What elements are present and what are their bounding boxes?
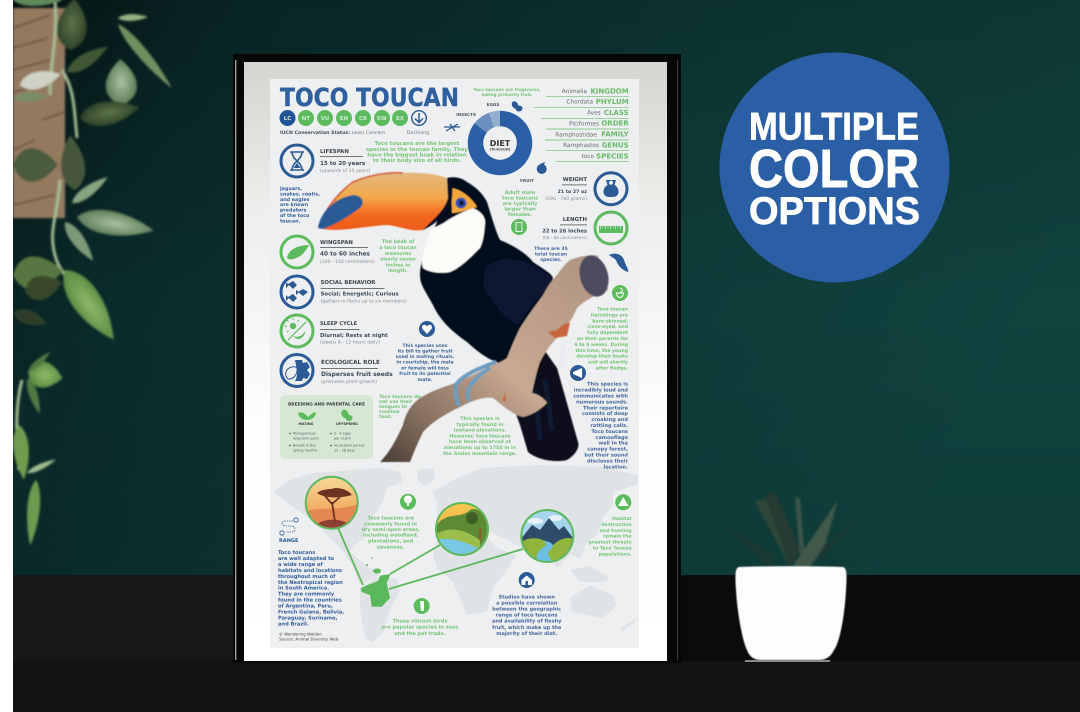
range text: in South America. — [278, 586, 329, 592]
breeding and parental care panel: Incubation period: — [334, 444, 365, 448]
breeding and parental care panel: per clutch — [334, 436, 351, 440]
fact: elevations: the Andes mountain range. — [443, 451, 517, 457]
social behavior block — [281, 276, 407, 308]
fact: elevations: typically found in — [456, 422, 504, 428]
callout: multiple color options: COLOR — [749, 139, 919, 199]
fact: correlation: range of toco toucans — [496, 613, 558, 619]
taxonomy table: ORDER — [601, 120, 629, 128]
diet donut chart: INSECTS — [456, 112, 476, 117]
fact: frugivores: Toco toucans are frugivores, — [473, 87, 541, 92]
fact: mating ritual icon — [419, 321, 435, 337]
fact: elevations: This species is — [460, 416, 500, 422]
fact: mating ritual: mate. — [418, 377, 433, 383]
fact: adult male size: females. — [508, 212, 532, 218]
range text: habitats and locations — [278, 568, 342, 574]
taxonomy table — [534, 87, 630, 162]
breeding and parental care panel: Monogamous — [293, 432, 316, 436]
weight block: (590 - 760 grams) — [545, 196, 587, 202]
fact: hatchlings: Toco toucan — [597, 306, 628, 312]
fact: hatchlings: on their parents for — [577, 336, 629, 342]
fact: correlation: between the geographic — [492, 607, 561, 613]
weight block — [545, 173, 627, 205]
taxonomy table: SPECIES — [596, 152, 629, 160]
credit: Source: Animal Diversity Web — [279, 636, 339, 641]
branch — [380, 255, 608, 462]
potted succulent — [722, 492, 860, 662]
fact: hatchlings: this time, the young — [575, 348, 628, 354]
fact: predators: snakes, coatis, — [280, 191, 320, 197]
breeding and parental care panel — [280, 395, 373, 459]
fact: hatchlings: hatchlings are — [591, 312, 628, 318]
habitat circle: mountains — [520, 509, 576, 565]
fact: correlation: a possible correlation — [496, 601, 558, 607]
fact: 35 species: There are 35 — [534, 246, 568, 252]
fact: tongues: food. — [379, 414, 393, 420]
taxonomy table: CLASS — [604, 109, 629, 117]
taxonomy table: FAMILY — [601, 131, 630, 139]
fact: hatchlings: bare-skinned, — [592, 318, 628, 324]
fact: 35 species: species. — [540, 257, 562, 263]
breeding and parental care panel: spring months — [293, 448, 318, 452]
fact: beak length: measures — [385, 251, 411, 257]
eye patch — [452, 188, 477, 213]
range text: found in the countries — [278, 598, 342, 604]
social behavior block: (gathers in flocks up to six members) — [320, 298, 407, 304]
fact: hatchlings: after fledge. — [596, 366, 628, 372]
fact: correlation: fruit, which make up the — [492, 625, 562, 631]
white bib — [422, 208, 485, 273]
fact: hatchlings: develop their beaks — [577, 354, 628, 360]
range text: Paraguay, Suriname, — [278, 615, 338, 621]
icon: range route — [280, 518, 298, 535]
diet donut chart: FRUIT — [520, 178, 534, 183]
fact: sounds: numerous sounds. — [576, 399, 628, 405]
white left edge — [0, 0, 13, 712]
fact: sounds: croaking and — [591, 417, 628, 423]
breeding and parental care panel: Breeds in the — [293, 444, 316, 448]
fact: predators: are known — [280, 202, 309, 208]
fact: beak length: inches in — [386, 262, 411, 268]
conservation status badges: EX — [396, 116, 405, 122]
fact: 35 species: total toucan — [535, 252, 567, 258]
fact: adult male size: Adult male — [505, 190, 536, 196]
range text: They are commonly — [278, 592, 335, 598]
fact: largest species: have the biggest beak in relation — [367, 152, 467, 159]
fact: beak length: a toco toucan — [379, 245, 417, 251]
icon: small toucan — [609, 254, 628, 272]
fact: sounds: incredibly loud and — [574, 388, 628, 394]
conservation status badges: CR — [359, 116, 368, 122]
fact: threats: and hunting — [600, 528, 632, 534]
ecological role block: (promotes plant growth) — [321, 379, 377, 385]
fact: threats: greatest threats — [588, 539, 632, 545]
fact: sounds: Their repertoire — [583, 405, 629, 411]
fact: mating ritual: fruit to its potential — [399, 371, 451, 377]
taxonomy table: toco — [581, 153, 594, 160]
hanging plant with basket — [11, 0, 176, 546]
taxonomy table: Ramphastos — [563, 142, 599, 149]
fact: elevations: However, toco toucans — [449, 434, 511, 440]
fact: mating ritual: its bill to gather fruit — [398, 348, 453, 354]
callout: multiple color options: MULTIPLE — [749, 106, 919, 148]
fact: elevations: have been observed at — [449, 439, 512, 445]
wingspan block: (100 - 150 centimeters) — [320, 259, 375, 265]
poster sheet — [270, 79, 639, 648]
body — [420, 177, 553, 362]
fact: correlation: majority of their diet. — [496, 631, 557, 637]
taxonomy table: Aves — [587, 110, 601, 117]
lifespan block: 15 to 20 years — [320, 160, 366, 167]
fact: sounds: canopy forest, — [587, 447, 628, 453]
fact: elevations: elevations up to 1750 m in — [444, 445, 517, 451]
fact: pet trade: are popular species in zoos — [382, 625, 458, 631]
length block: LENGTH — [563, 217, 587, 223]
fact: threats: to Toco Toucan — [593, 545, 632, 551]
taxonomy table: Piciformes — [569, 120, 599, 127]
fact: sounds: Toco toucans — [591, 429, 628, 435]
diet donut chart: FRUGIVORE — [490, 148, 510, 152]
taxonomy table: Ramphastidae — [555, 131, 597, 138]
fact: tongues: swallow — [379, 409, 400, 415]
fact: habitat: Toco toucans are — [367, 516, 415, 522]
world map background — [273, 465, 638, 642]
icon: threats warning — [615, 494, 631, 510]
ecological role block: ECOLOGICAL ROLE — [321, 359, 380, 366]
shelf — [13, 575, 1080, 712]
declining label: Declining — [407, 130, 429, 136]
weight block: 21 to 27 oz — [558, 189, 587, 195]
fact: habitat: savannas. — [377, 545, 405, 551]
fact: threats: populations. — [599, 552, 632, 558]
branch end cut — [575, 252, 613, 300]
habitat connector lines and range shape — [338, 528, 523, 607]
fact: sounds: This species is — [587, 382, 628, 388]
taxonomy table: KINGDOM — [590, 87, 629, 95]
fact: mating ritual: used in mating rituals. — [396, 354, 455, 360]
range text: Toco toucans — [278, 550, 315, 556]
conservation status badges: NT — [302, 116, 310, 122]
range label: RANGE — [279, 538, 299, 544]
fact: adult male size: larger than — [504, 207, 536, 213]
fact: habitat: including woodland, — [363, 533, 419, 539]
title: TOCO TOUCAN — [280, 83, 459, 112]
toucan bird illustration — [318, 173, 613, 462]
ecological role block — [281, 354, 393, 386]
wingspan block: 40 to 60 inches — [320, 250, 371, 258]
conservation status badges: EN — [340, 116, 349, 122]
fact: tongues: not use their — [379, 399, 413, 405]
fact: threats: destruction — [601, 522, 632, 528]
fact: sounds: rattling calls. — [590, 423, 628, 429]
fact: beak length: The beak of — [382, 239, 415, 245]
range text: are well adapted to — [278, 556, 335, 562]
icon: pet trade — [414, 598, 430, 614]
breeding and parental care panel: OFFSPRING — [336, 422, 358, 426]
icon: tree — [400, 494, 416, 510]
fact: sounds: location. — [604, 464, 628, 470]
tail — [497, 330, 578, 461]
breeding and parental care panel: BREEDING AND PARENTAL CARE — [288, 402, 365, 408]
lifespan block — [281, 145, 371, 177]
sleep cycle block: (sleeps 8 - 12 hours daily) — [320, 340, 380, 346]
lifespan block: (upwards of 25 years) — [320, 168, 371, 174]
callout: multiple color options: OPTIONS — [749, 190, 920, 233]
fact: correlation: Studies have shown — [498, 595, 555, 601]
diet donut chart — [444, 100, 547, 183]
icon: size comparison — [511, 219, 527, 235]
ecological role block: Disperses fruit seeds — [321, 371, 393, 378]
diet donut chart: DIET — [490, 139, 511, 148]
conservation status badges: LC — [284, 116, 291, 122]
fact: largest species: to their body size of all birds. — [373, 157, 461, 164]
fact: threats: remain the — [603, 534, 632, 540]
icon: eggs — [510, 100, 522, 112]
range text: of Argentina, Peru, — [278, 604, 333, 610]
credit: © Wandering Walden — [279, 632, 322, 637]
icon: fruit — [537, 162, 547, 174]
fact: beak length: length. — [388, 268, 408, 274]
fact: threats: Habitat — [612, 516, 632, 522]
fact: predators: toucan. — [280, 218, 300, 224]
diet donut chart: EGGS — [487, 102, 499, 107]
fact: sounds: but their sound — [584, 452, 628, 458]
foot — [456, 362, 496, 406]
icon: home — [519, 572, 535, 588]
conservation status badges: VU — [321, 116, 329, 122]
fact: adult male size: are typically — [503, 201, 538, 207]
fact: hatchlings icon — [612, 285, 628, 301]
fact: adult male size: toco toucans — [502, 196, 538, 202]
fact: mating ritual: This species uses — [402, 343, 448, 349]
fact: hatchlings: close-eyed, and — [587, 324, 628, 330]
breeding and parental care panel: MATING — [299, 422, 314, 426]
fact: habitat: plantations, and — [368, 539, 414, 545]
length block: 22 to 26 inches — [542, 228, 587, 234]
fact: pet trade: These vibrant birds — [393, 619, 447, 625]
poster: toco toucan infographic — [270, 79, 639, 648]
fact: sounds: well in the — [598, 441, 629, 447]
range text: a wide range of — [278, 562, 323, 568]
taxonomy table: Chordata — [566, 99, 593, 106]
fact: largest species: species in the toucan family. They — [366, 146, 468, 153]
length block: (56 - 66 centimeters) — [542, 235, 587, 240]
sleep cycle block — [281, 315, 388, 347]
fact: sounds icon — [570, 365, 586, 381]
wing — [483, 259, 553, 325]
fact: beak length: nearly seven — [380, 257, 416, 263]
callout: multiple color options — [720, 52, 950, 282]
fact: hatchlings: 6 to 8 weeks. During — [574, 342, 628, 348]
breeding and parental care panel: 2 - 4 eggs — [334, 432, 351, 436]
weight block: WEIGHT — [563, 177, 587, 183]
breeding and parental care panel: long-term pairs — [293, 436, 319, 440]
fact: predators: Jaguars, — [279, 186, 302, 192]
wingspan block — [281, 236, 375, 268]
fact: hatchlings: fully dependent — [587, 330, 629, 336]
range text: and Brazil. — [278, 621, 309, 627]
fact: predators: of the toco — [280, 213, 310, 219]
fact: sounds: camouflage — [595, 435, 629, 441]
fact: frugivores: eating primarily fruit. — [481, 92, 533, 97]
fact: pet trade: and the pet trade. — [394, 631, 446, 637]
habitat circle: savanna — [305, 476, 359, 530]
range text: throughout much of — [278, 574, 336, 580]
fact: tongues: Toco toucans do — [379, 394, 421, 400]
fact: habitat: commonly found in — [364, 521, 418, 527]
conservation status badges — [280, 110, 426, 126]
IUCN status line: IUCN Conservation Status: Least Concern — [280, 130, 385, 136]
fact: largest species: Toco toucans are the largest — [374, 140, 460, 147]
sleep cycle block: Diurnal; Rests at night — [320, 332, 388, 339]
fact: elevations: lowland elevations. — [454, 428, 506, 434]
beak — [318, 173, 450, 230]
fact: predators: and eagles — [280, 197, 310, 203]
social behavior block: Social; Energetic; Curious — [320, 290, 399, 298]
social behavior block: SOCIAL BEHAVIOR — [320, 280, 376, 286]
fact: sounds: communicates with — [573, 394, 628, 400]
taxonomy table: PHYLUM — [596, 98, 629, 106]
fact: mating ritual: In courtship, the male — [396, 360, 454, 366]
range text: the Neotropical region — [278, 580, 343, 586]
length block — [542, 212, 627, 244]
sleep cycle block: SLEEP CYCLE — [320, 321, 358, 327]
fact: correlation: and availability of fleshy — [492, 619, 562, 625]
fact: habitat: dry semi-open areas, — [362, 527, 420, 533]
taxonomy table: GENUS — [602, 141, 629, 149]
fact: tongues: tongues to — [379, 404, 407, 410]
taxonomy table: Animalia — [562, 88, 587, 95]
picture frame — [233, 54, 681, 663]
fact: mating ritual: or female will toss — [401, 366, 449, 372]
lifespan block: LIFESPAN — [320, 149, 349, 155]
fact: predators: predators — [280, 208, 307, 214]
range text: French Guiana, Bolivia, — [278, 610, 344, 616]
fact: sounds: consists of deep — [582, 411, 628, 417]
eye — [456, 198, 466, 208]
conservation status badges: EW — [377, 116, 387, 122]
breeding and parental care panel: 15 - 18 days — [334, 448, 355, 452]
fact: sounds: discloses their — [587, 458, 629, 464]
icon: insect — [444, 124, 460, 131]
fact: hatchlings: and will shortly — [588, 360, 628, 366]
habitat circle: woodland — [435, 502, 490, 556]
wingspan block: WINGSPAN — [320, 240, 353, 246]
